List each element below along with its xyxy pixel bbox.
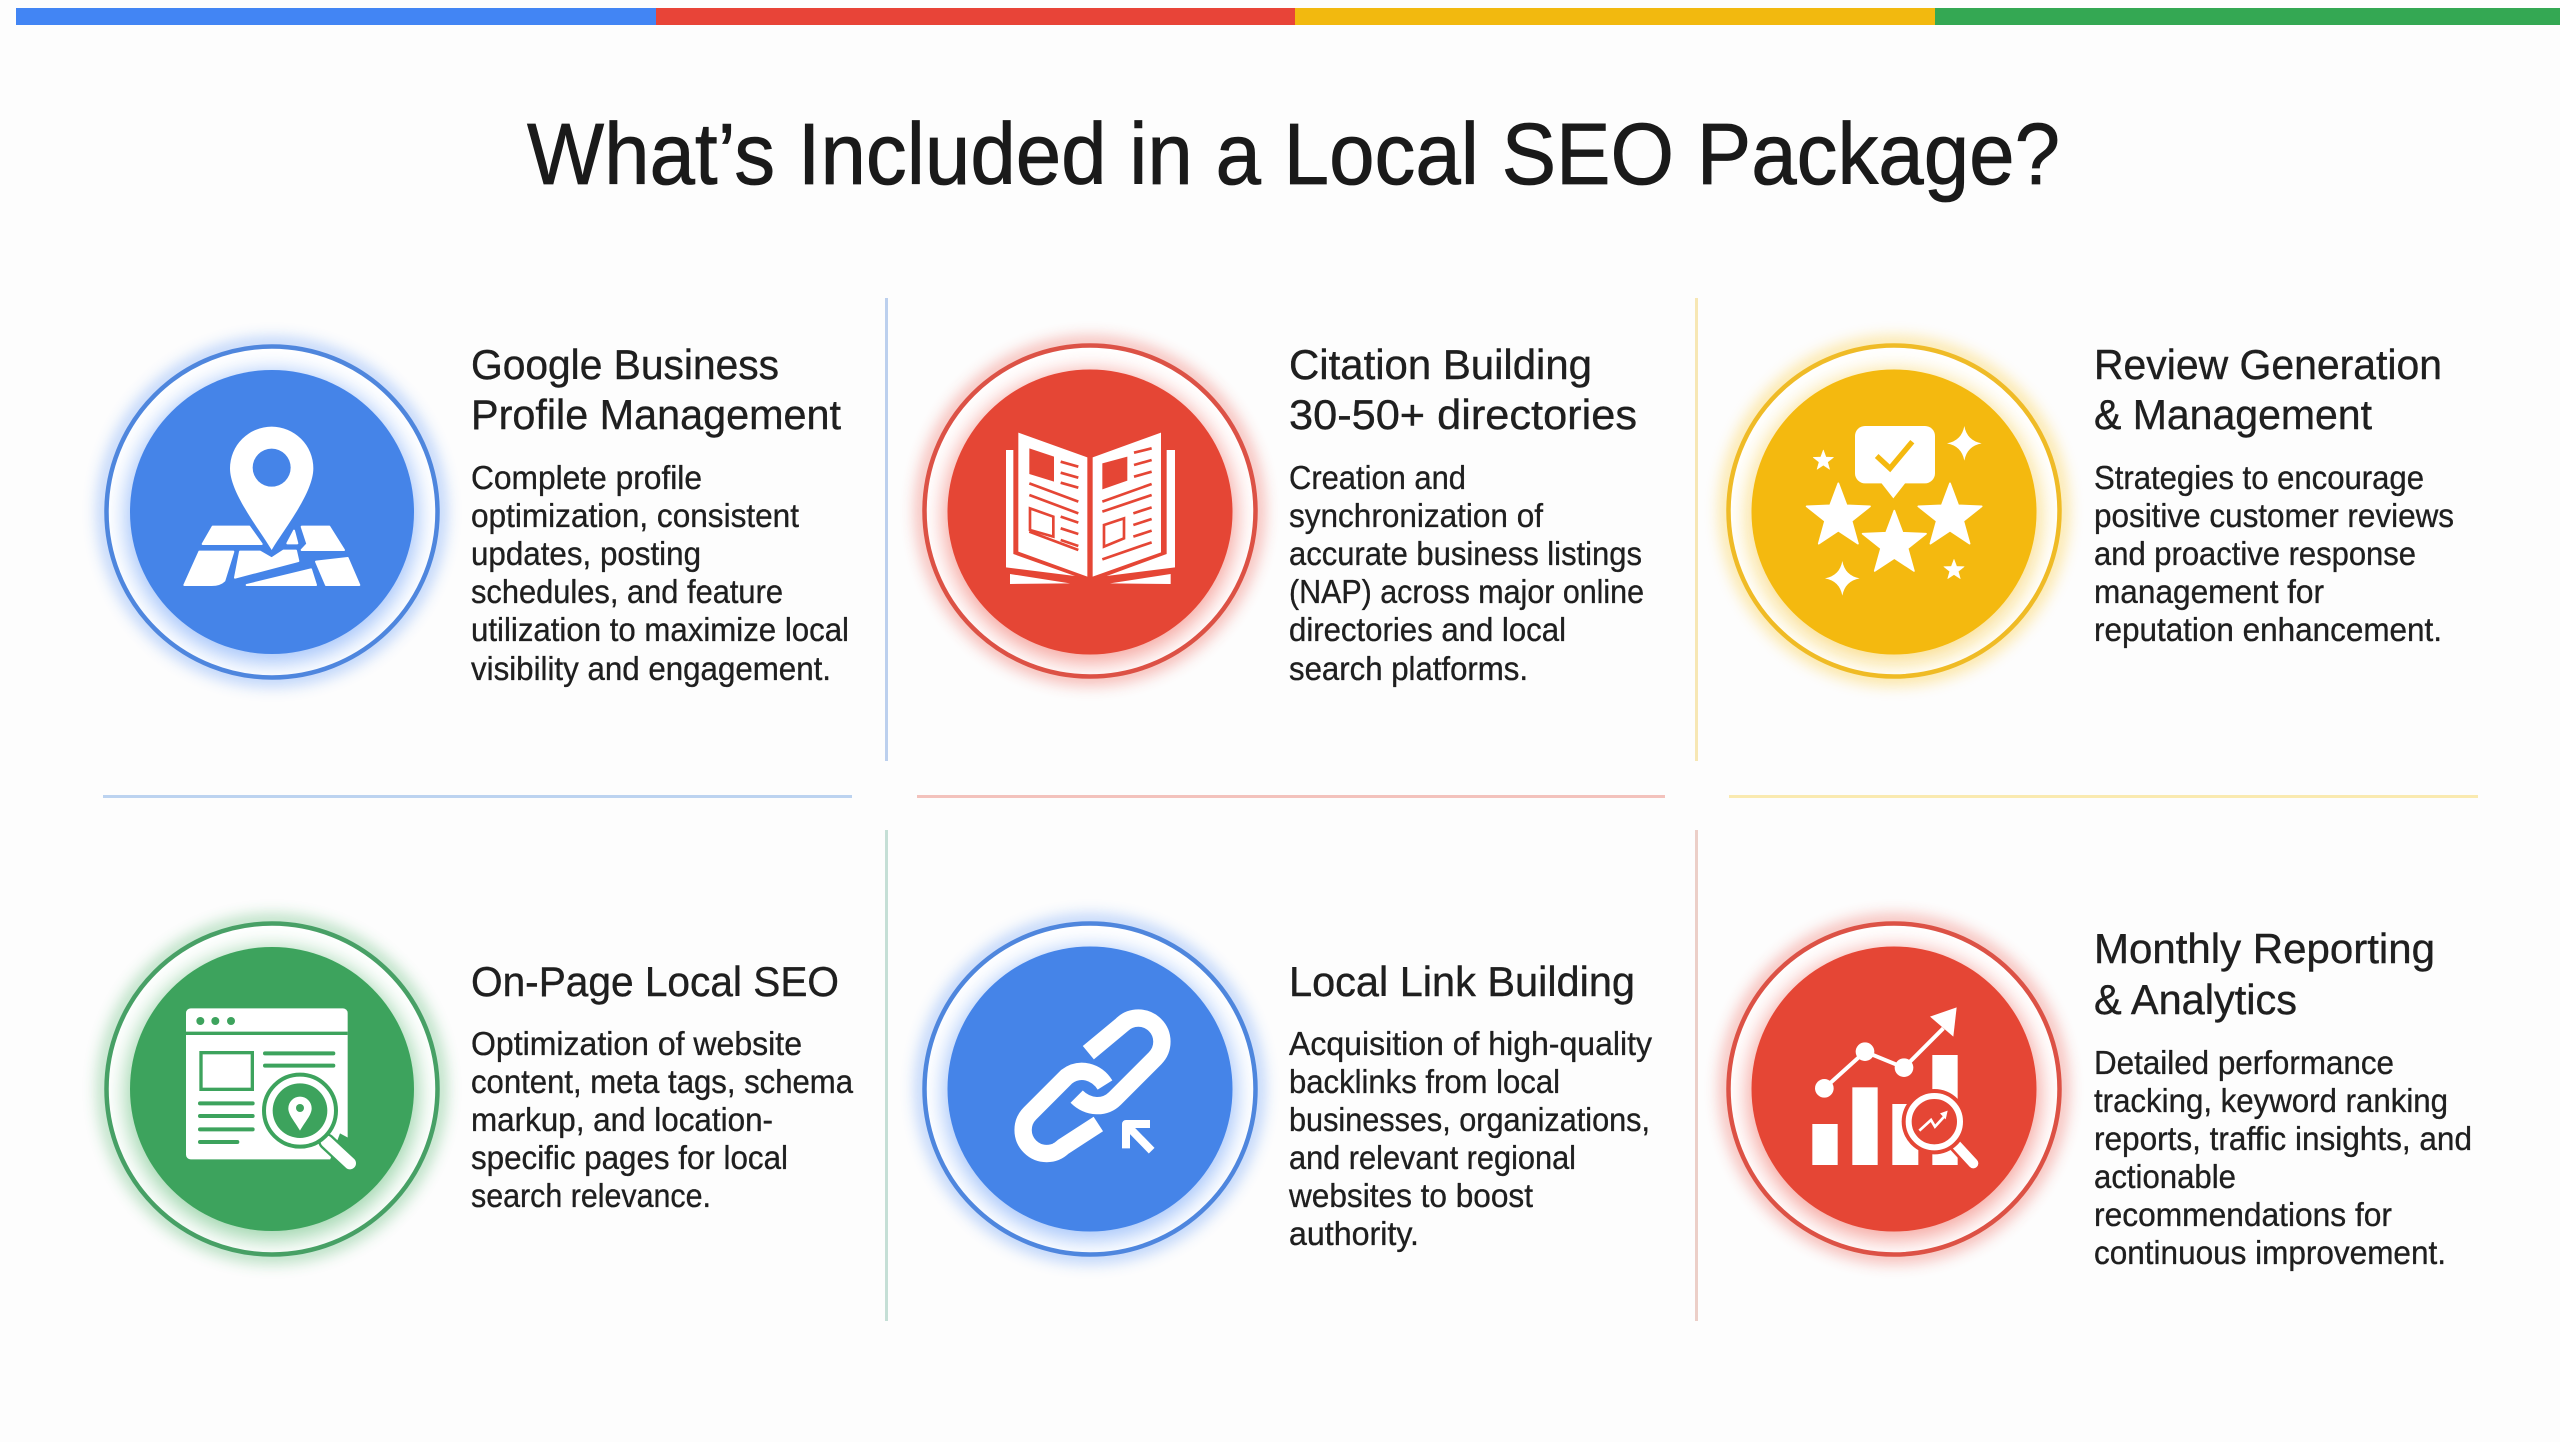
panel: Citation Building [923, 341, 1644, 687]
top colour bar [16, 8, 2560, 25]
heading: Local Link Building [1289, 958, 1635, 1005]
heading: Google Business [471, 341, 779, 388]
description: Strategies to encourage [2094, 459, 2424, 496]
description: and proactive response [2094, 535, 2416, 572]
icon: map pin on map in blue circle [105, 345, 439, 679]
description: Acquisition of high-quality [1289, 1025, 1652, 1062]
heading: & Management [2094, 391, 2372, 438]
description: optimization, consistent [471, 497, 799, 534]
description: directories and local [1289, 611, 1566, 648]
description: utilization to maximize local [471, 611, 849, 648]
description [1288, 1025, 1652, 1252]
description: visibility and engagement. [471, 650, 831, 687]
icon: chain link with cursor in blue circle [923, 922, 1257, 1256]
description: search relevance. [471, 1177, 711, 1214]
description: accurate business listings [1289, 535, 1642, 572]
description: reports, traffic insights, and [2094, 1120, 2472, 1157]
description: Optimization of website [471, 1025, 802, 1062]
description [2094, 1044, 2472, 1271]
panel: Review Generation & Management [1727, 341, 2454, 678]
title: What’s Included in a Local SEO Package? [527, 106, 2060, 203]
description: businesses, organizations, [1289, 1101, 1650, 1138]
heading [1289, 341, 1637, 438]
panel: On-Page Local SEO [105, 922, 854, 1256]
panel: Google Business Profile Management [105, 341, 849, 687]
description: updates, posting [471, 535, 701, 572]
description [471, 1025, 854, 1214]
description: continuous improvement. [2094, 1234, 2446, 1271]
description: actionable [2094, 1158, 2236, 1195]
description: websites to boost [1288, 1177, 1533, 1214]
description: Creation and [1289, 459, 1466, 496]
heading: Citation Building [1289, 341, 1592, 388]
heading: & Analytics [2094, 976, 2297, 1023]
heading: 30-50+ directories [1289, 391, 1637, 438]
description: backlinks from local [1289, 1063, 1560, 1100]
heading: On-Page Local SEO [471, 958, 839, 1005]
description: schedules, and feature [471, 573, 783, 610]
icon: browser window with magnifier in green circle [105, 922, 439, 1256]
description: tracking, keyword ranking [2094, 1082, 2448, 1119]
description: management for [2094, 573, 2324, 610]
heading: Monthly Reporting [2094, 925, 2435, 972]
heading: Review Generation [2094, 341, 2442, 388]
description [2094, 459, 2454, 648]
description: authority. [1289, 1215, 1419, 1252]
description: markup, and location- [471, 1101, 773, 1138]
description: and relevant regional [1289, 1139, 1576, 1176]
icon: open book in red circle [923, 344, 1257, 678]
description: positive customer reviews [2094, 497, 2454, 534]
description: content, meta tags, schema [471, 1063, 854, 1100]
panel: Local Link Building [923, 922, 1652, 1256]
panel: Monthly Reporting & Analytics [1727, 922, 2472, 1271]
icon: review bubble and stars in yellow circle [1727, 344, 2061, 678]
description: (NAP) across major online [1289, 573, 1644, 610]
description: reputation enhancement. [2094, 611, 2442, 648]
heading [471, 341, 841, 438]
description [1289, 459, 1644, 687]
description [471, 459, 849, 687]
description: Detailed performance [2094, 1044, 2394, 1081]
description: synchronization of [1289, 497, 1544, 534]
icon: bar chart with trend arrow and magnifier in red circle [1727, 922, 2061, 1256]
description: search platforms. [1289, 650, 1528, 687]
description: recommendations for [2094, 1196, 2392, 1233]
description: Complete profile [471, 459, 702, 496]
description: specific pages for local [471, 1139, 788, 1176]
heading [2094, 925, 2435, 1023]
heading: Profile Management [471, 391, 841, 438]
heading [2094, 341, 2442, 438]
